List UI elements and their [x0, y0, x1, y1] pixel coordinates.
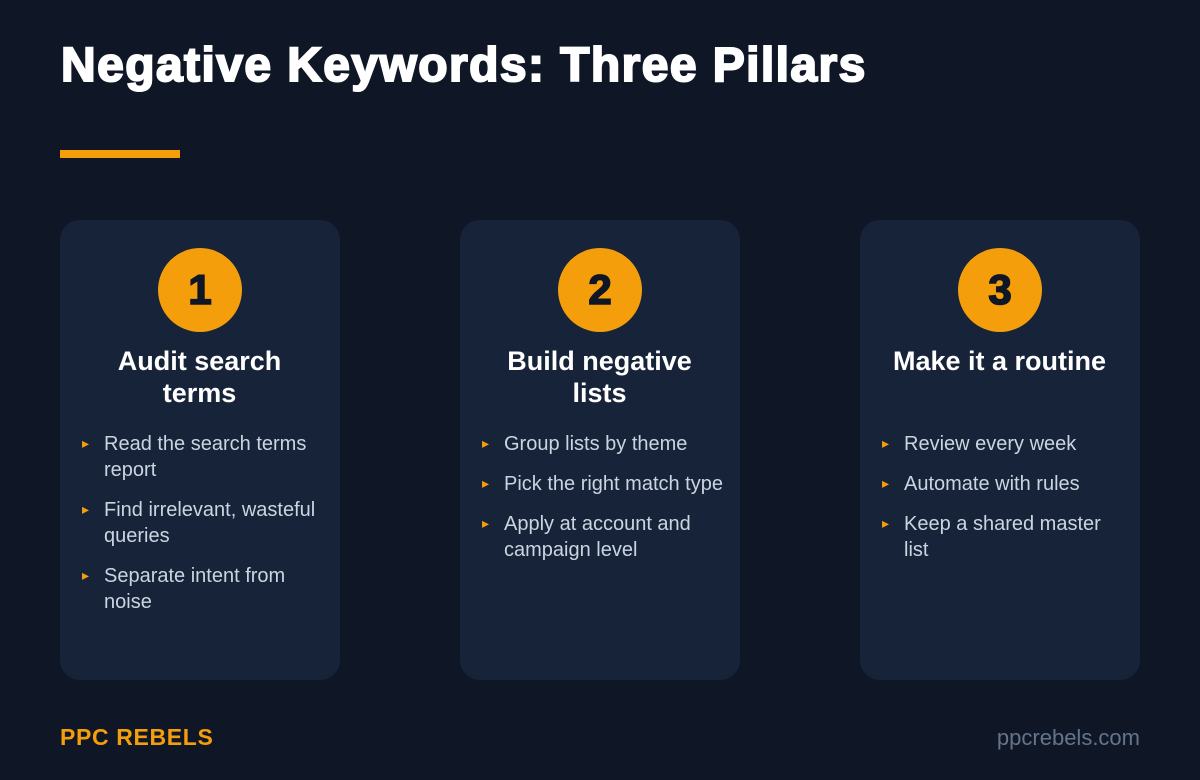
list: pillar 3 points: Keep a shared master — [904, 513, 1101, 535]
list: pillar 3 points: Automate with rules — [904, 473, 1080, 495]
list: pillar 1 points: Read the search terms report — [104, 433, 306, 481]
list: pillar 2 points — [482, 433, 723, 561]
list: pillar 2 points: Group lists by theme — [504, 433, 687, 455]
list: pillar 2 points: ▸ — [482, 475, 489, 491]
panel: pillar 3 — [860, 220, 1140, 680]
footer brand: PPC REBELS — [60, 724, 213, 750]
footer website: ppcrebels.com — [997, 725, 1140, 750]
panel: pillar 1 — [60, 220, 340, 680]
heading: pillar 3: Make it a routine — [893, 346, 1106, 376]
accent rule — [60, 150, 180, 158]
list: pillar 1 points: ▸ — [82, 567, 89, 583]
list: pillar 3 points: list — [904, 539, 928, 561]
list: pillar 2 points: Pick the right match type — [504, 473, 723, 495]
list: pillar 2 points: Apply at account and campaign level — [504, 513, 691, 561]
list: pillar 3 points: Review every week — [904, 433, 1076, 455]
heading: pillar 2: Build negative lists — [507, 346, 692, 408]
panel: pillar 2 — [460, 220, 740, 680]
icon: number 2 badge: 2 — [588, 266, 612, 313]
list: pillar 2 points: ▸ — [482, 435, 489, 451]
list: pillar 1 points: ▸ — [82, 435, 89, 451]
list: pillar 3 points: ▸ — [882, 475, 889, 491]
list: pillar 1 points: ▸ — [82, 501, 89, 517]
list: pillar 1 points — [82, 433, 315, 613]
list: pillar 2 points: ▸ — [482, 515, 489, 531]
list: pillar 3 points: ▸ — [882, 435, 889, 451]
heading: pillar 1: Audit search terms — [118, 346, 281, 408]
icon: number 2 badge — [558, 248, 642, 332]
list: pillar 3 points — [882, 433, 1101, 561]
list: pillar 1 points: Find irrelevant, wasteful queries — [104, 499, 315, 547]
icon: number 1 badge — [158, 248, 242, 332]
list: pillar 3 points: ▸ — [882, 515, 889, 531]
list: pillar 1 points: Separate intent from noise — [104, 565, 285, 613]
icon: number 3 badge: 3 — [988, 266, 1012, 313]
icon: number 3 badge — [958, 248, 1042, 332]
icon: number 1 badge: 1 — [188, 266, 212, 313]
title: Negative Keywords: Three Pillars — [61, 39, 867, 92]
